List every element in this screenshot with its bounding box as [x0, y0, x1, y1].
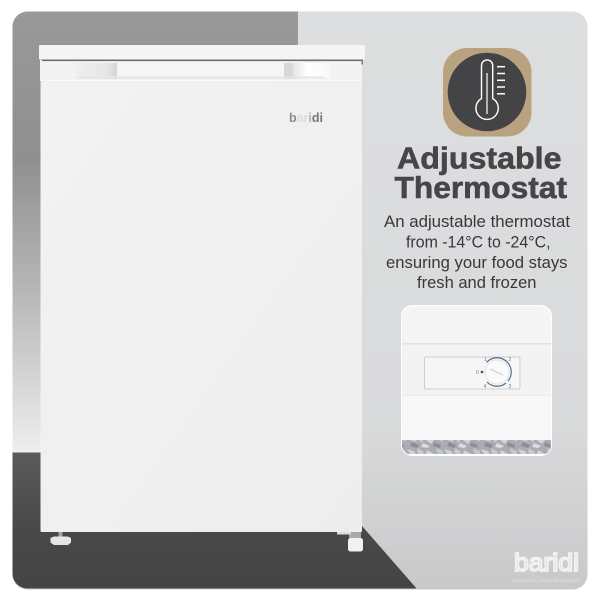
- description text: fresh and frozen: [417, 273, 536, 292]
- thermostat dial: 3: [508, 384, 512, 390]
- title: Adjustable: [397, 140, 562, 176]
- panel: dark floor: [12, 452, 417, 589]
- thermostat dial: [476, 357, 512, 390]
- description text: An adjustable thermostat: [384, 212, 570, 231]
- freezer foot right: [337, 532, 363, 552]
- thermostat dial: 2: [508, 357, 512, 363]
- description text: ensuring your food stays: [386, 253, 568, 272]
- panel: right light background: [298, 12, 588, 530]
- freezer body: [40, 81, 362, 532]
- description text: from -14°C to -24°C,: [406, 232, 550, 252]
- freezer appliance: [39, 45, 365, 552]
- thermostat dial: 0: [476, 370, 479, 376]
- logo: baridi: baridi: [514, 549, 579, 577]
- panel: thermostat close-up photo: [401, 305, 552, 456]
- vent grille: [402, 440, 551, 454]
- control plate: [424, 357, 520, 389]
- logo: baridi: INNOVATIVE | HOME | TECHNOLOGY: [513, 579, 580, 583]
- thermostat dial: 4: [484, 384, 486, 390]
- freezer lid: [39, 45, 365, 64]
- icon: thermometer: [443, 48, 532, 136]
- thermostat dial: 1: [484, 357, 487, 363]
- freezer foot left: [50, 532, 71, 545]
- panel: left grey wall: [12, 11, 298, 453]
- title: Thermostat: [394, 170, 567, 205]
- freezer handle band: [40, 60, 362, 81]
- title: [394, 140, 567, 205]
- brand mark on door: baridi: [289, 110, 323, 125]
- description text: [384, 212, 570, 292]
